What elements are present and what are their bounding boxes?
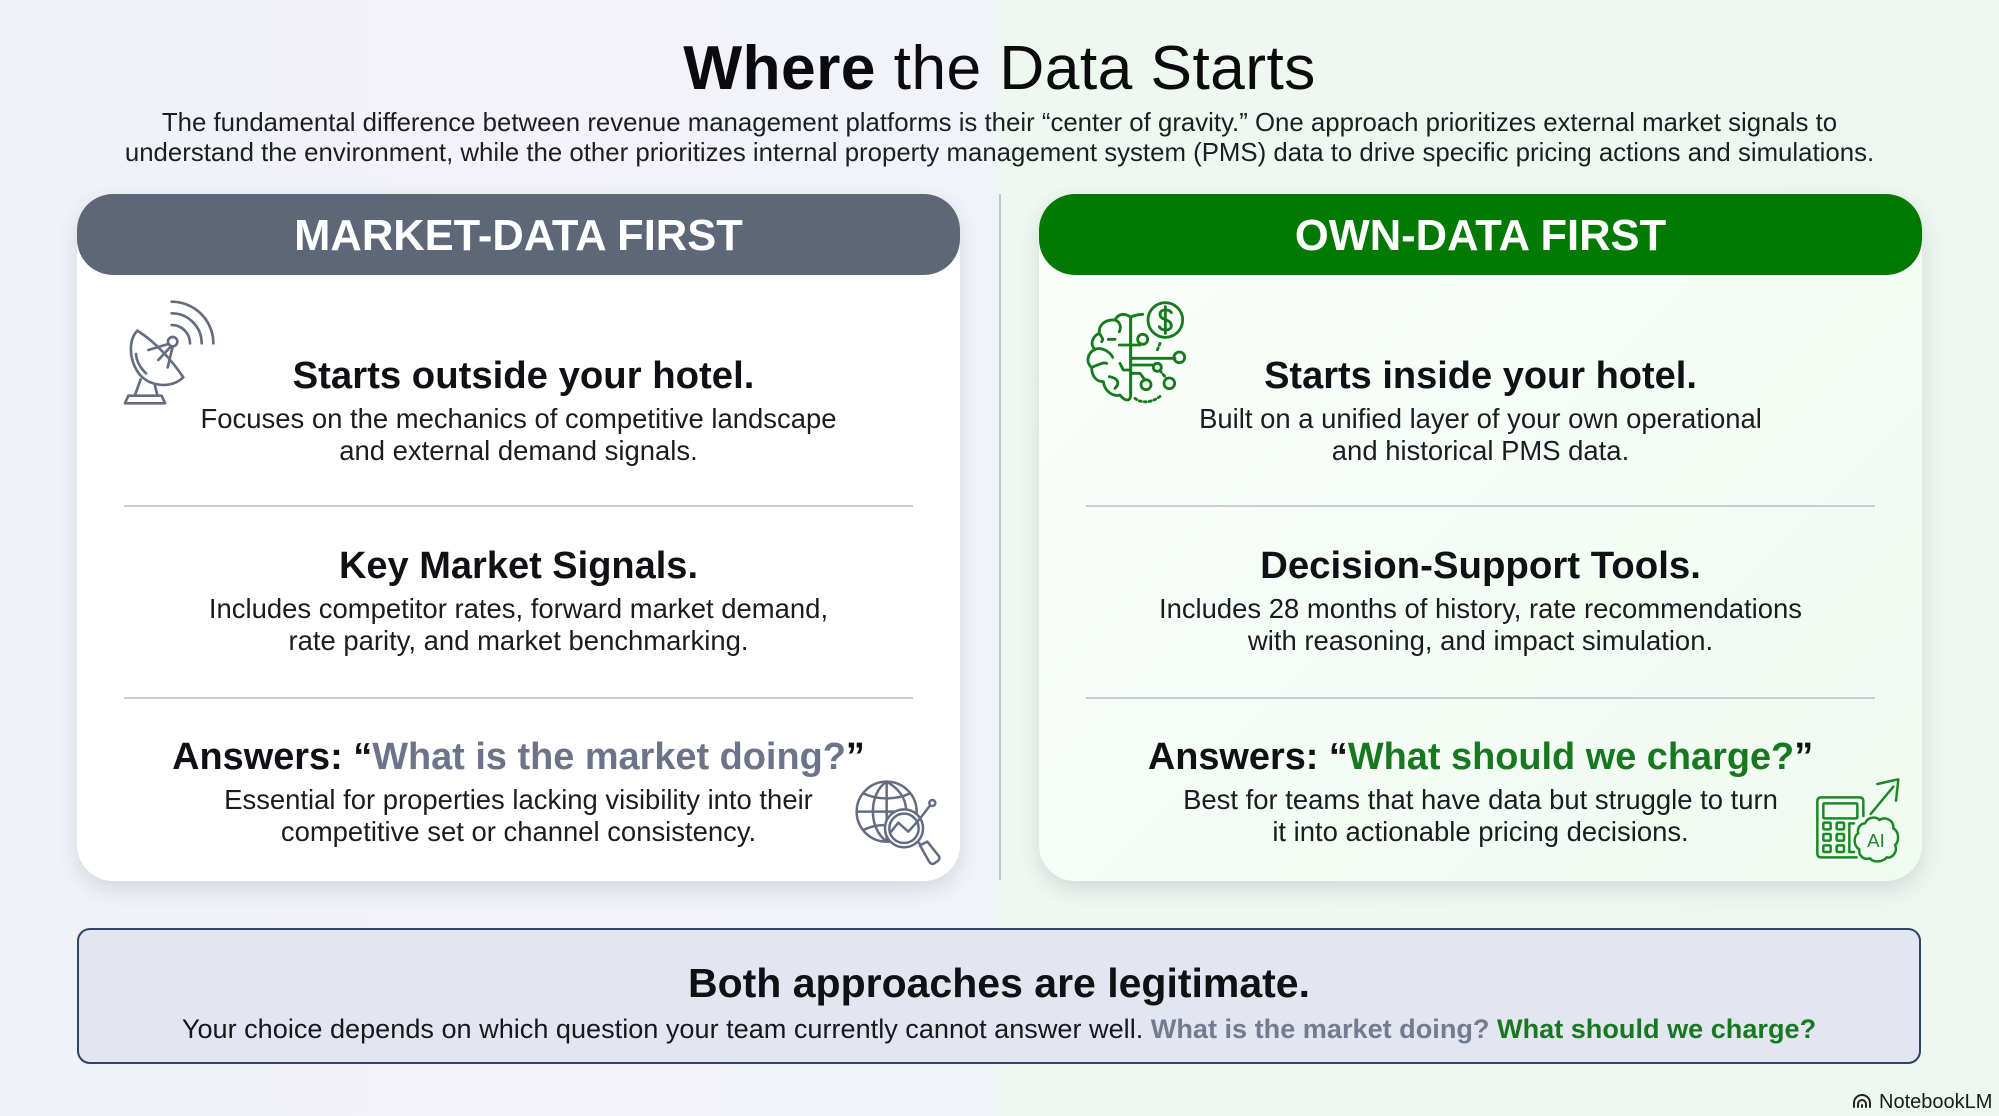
text: best for teams: Best for teams that have data but struggle to turn	[1183, 784, 1778, 815]
logo text: NotebookLM	[1879, 1091, 1992, 1113]
icon: calculator with AI: AI	[1867, 830, 1885, 851]
icon: calculator with AI	[1816, 778, 1900, 863]
heading: starts outside: Starts outside your hotel.	[293, 354, 754, 397]
center divider	[999, 194, 1001, 880]
panel header: OWN-DATA FIRST	[1295, 212, 1666, 260]
text: includes competitor: rate parity, and market benchmarking.	[288, 624, 749, 656]
callout heading: Both approaches are legitimate.	[688, 960, 1310, 1006]
text: built on: and historical PMS data.	[1332, 434, 1629, 466]
text: includes 28 months: with reasoning, and impact simulation.	[1248, 624, 1713, 656]
text: focuses: Focuses on the mechanics of competitive landscape	[200, 403, 836, 434]
text: essential: competitive set or channel consistency.	[281, 816, 756, 846]
subtitle: understand the environment, while the other prioritizes internal property management system (PMS) data to drive specific pricing actions and simulations.	[125, 139, 1874, 167]
text: best for teams: it into actionable pricing decisions.	[1272, 816, 1689, 846]
heading: key market signals: Key Market Signals.	[339, 545, 698, 587]
icon: notebook logo	[1853, 1094, 1871, 1108]
text: focuses	[200, 403, 836, 466]
heading: decision support: Decision-Support Tools.	[1260, 544, 1701, 587]
panel header	[1039, 194, 1922, 275]
text: essential: Essential for properties lacking visibility into their	[224, 784, 813, 815]
watermark: NotebookLM	[1853, 1091, 1992, 1113]
text: includes competitor	[209, 593, 828, 656]
heading: answers market: Answers: “What is the market doing?”	[172, 736, 865, 778]
icon: brain with dollar	[1086, 301, 1186, 404]
text: built on: Built on a unified layer of your own operational	[1199, 403, 1762, 434]
heading: starts inside: Starts inside your hotel.	[1264, 355, 1697, 397]
callout text: Your choice depends on which question your team currently cannot answer well. What is the market doing? What should we charge?	[182, 1013, 1816, 1044]
text: includes competitor: Includes competitor rates, forward market demand,	[209, 593, 828, 624]
panel: market-data first	[77, 194, 960, 881]
text: built on	[1199, 403, 1762, 466]
icon: satellite dish	[124, 300, 215, 405]
text: best for teams	[1183, 784, 1778, 847]
subtitle	[125, 109, 1874, 167]
heading: answers charge: Answers: “What should we charge?”	[1148, 736, 1813, 778]
text: focuses: and external demand signals.	[339, 434, 698, 466]
text: includes 28 months: Includes 28 months of history, rate recommendations	[1159, 593, 1802, 624]
panel header: MARKET-DATA FIRST	[294, 212, 743, 260]
title: Where the Data Starts	[683, 34, 1316, 103]
text: includes 28 months	[1159, 593, 1802, 656]
text: essential	[224, 784, 813, 847]
panel: own-data first	[1039, 194, 1922, 881]
callout: both approaches	[77, 928, 1921, 1064]
panel header	[77, 194, 960, 275]
subtitle: The fundamental difference between revenue management platforms is their “center of gravity.” One approach prioritizes external market signals to	[162, 109, 1837, 137]
icon: globe with magnifier	[855, 780, 941, 866]
